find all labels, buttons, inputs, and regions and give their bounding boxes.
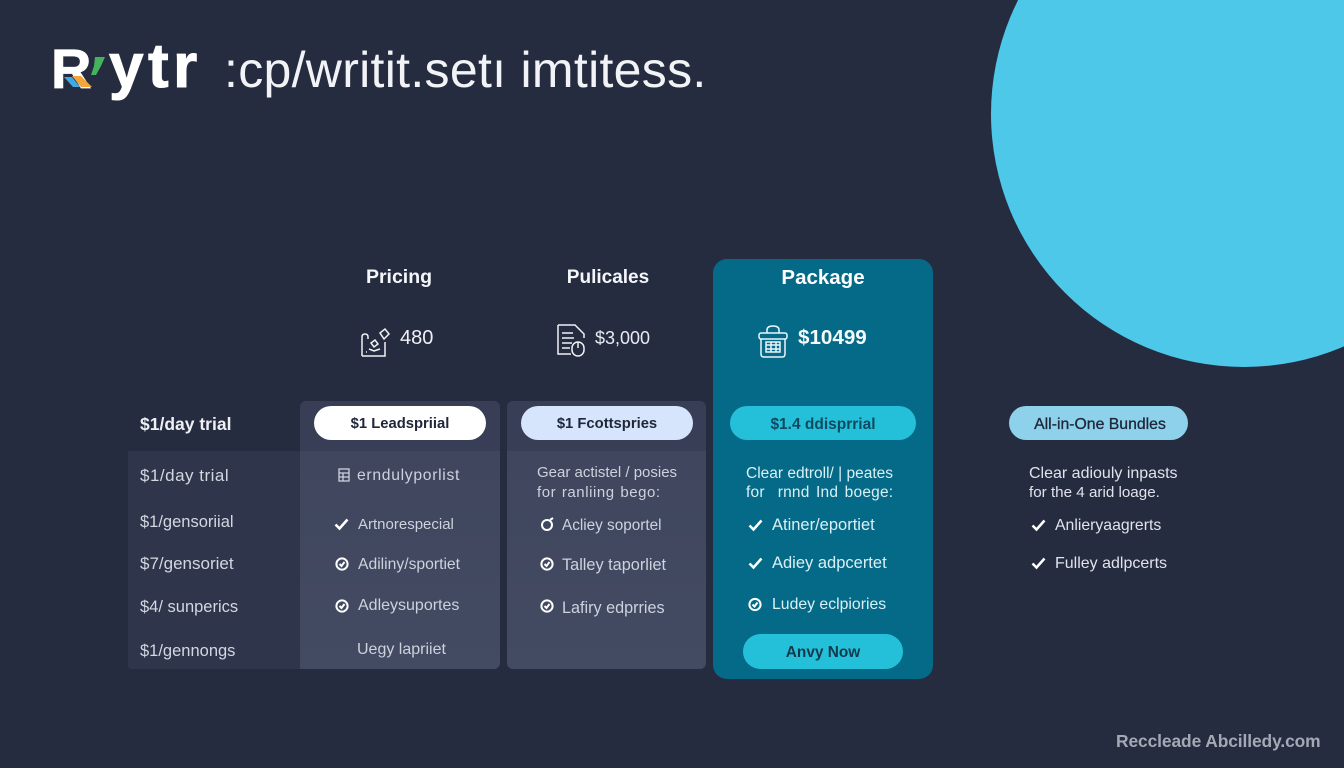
plan pill: $1 Leadspriial — [351, 416, 449, 432]
row strip background — [128, 451, 300, 669]
row label 3: $7/gensoriet — [140, 554, 234, 573]
feature text: Ludey eclpiories — [772, 596, 886, 613]
logo letter R: R — [51, 36, 91, 100]
feature text: Adiey adpcertet — [772, 554, 887, 572]
feature description: Clear adiouly inpasts — [1029, 465, 1178, 482]
price block — [758, 325, 867, 358]
title — [51, 32, 707, 100]
feature text: Anlieryaagrerts — [1055, 517, 1161, 534]
feature row 3 — [748, 596, 886, 613]
logo colour marks — [64, 57, 105, 87]
feature text: Artnorespecial — [358, 516, 454, 533]
feature row 3 — [540, 599, 665, 617]
icon: check — [334, 518, 348, 530]
panel: pricing column — [300, 401, 500, 669]
row label 1: $1/day trial — [140, 466, 229, 485]
feature text: Fulley adlpcerts — [1055, 555, 1167, 572]
feature text: erndulyporlist — [357, 467, 460, 484]
feature description: for ranliing bego: — [537, 484, 661, 501]
icon: circle mark — [541, 517, 554, 531]
row label 5: $1/gennongs — [140, 642, 235, 660]
feature text: Acliey soportel — [562, 517, 661, 534]
panel: all-in-one bundles column — [1009, 406, 1188, 572]
feature text: Adleysuportes — [358, 597, 459, 614]
panel: row labels — [128, 414, 300, 669]
price value: 480 — [400, 327, 433, 349]
plan pill — [314, 406, 486, 440]
plan pill — [521, 406, 693, 440]
icon: check — [1032, 520, 1046, 532]
icon: document — [338, 468, 350, 482]
feature text: Adiliny/sportiet — [358, 556, 460, 573]
feature text: Lafiry edprries — [562, 599, 665, 617]
feature row 4: Uegy lapriiet — [357, 641, 446, 658]
plan pill — [1009, 406, 1188, 440]
panel: package column — [713, 259, 933, 679]
icon: calendar basket — [758, 325, 788, 358]
icon: check — [748, 558, 762, 570]
feature text: Talley taporliet — [562, 556, 666, 574]
feature row 2 — [540, 556, 666, 574]
feature description: for rnnd Ind boege: — [746, 484, 893, 501]
button: Anvy Now: Anvy Now — [786, 644, 860, 661]
feature description: Gear actistel / posies — [537, 464, 677, 481]
price: Pulicales column — [557, 324, 650, 357]
icon: circled check — [335, 599, 349, 613]
heading: Package: Package — [781, 266, 865, 289]
feature row 1 — [748, 516, 875, 534]
feature row 1 — [1032, 517, 1161, 534]
plan pill: All-in-One Bundles — [1034, 416, 1166, 433]
feature row 2 — [748, 554, 887, 572]
decorative circle — [991, 0, 1344, 367]
heading: Pricing: Pricing — [366, 266, 432, 288]
price value: $10499 — [798, 326, 867, 349]
footer watermark: Reccleade Abcilledy.com — [1116, 731, 1321, 751]
icon: circled check — [748, 598, 762, 612]
heading: Pulicales: Pulicales — [567, 267, 649, 288]
row label 2: $1/gensoriial — [140, 513, 234, 531]
icon: document with pen — [361, 328, 390, 357]
icon: document with mouse — [557, 324, 585, 357]
button: Anvy Now — [743, 634, 903, 669]
icon: check — [748, 520, 762, 532]
plan pill: $1 Fcottspries — [557, 416, 657, 432]
row label 4: $4/ sunperics — [140, 598, 238, 616]
feature row 3 — [335, 597, 459, 614]
feature description — [746, 465, 893, 501]
plan pill: $1.4 ddisprrial — [770, 416, 876, 433]
feature row 2 — [335, 556, 460, 573]
feature description — [537, 464, 677, 501]
feature row 2 — [1032, 555, 1167, 572]
feature text: Atiner/eportiet — [772, 516, 875, 534]
feature row 1 — [541, 517, 661, 534]
panel: publicales column — [507, 401, 706, 669]
price: Pricing column — [361, 327, 433, 357]
icon: circled check — [540, 557, 554, 571]
feature row 1 — [334, 516, 454, 533]
icon: circled check — [540, 599, 554, 613]
icon: check — [1032, 558, 1046, 570]
logo letters ytr: ytr — [109, 32, 202, 100]
feature description — [1029, 465, 1178, 501]
plan pill — [730, 406, 916, 440]
feature description: for the 4 arid loage. — [1029, 484, 1160, 501]
feature line with icon — [338, 467, 460, 484]
price value: $3,000 — [595, 328, 650, 348]
feature description: Clear edtroll/ | peates — [746, 465, 893, 482]
icon: circled check — [335, 557, 349, 571]
row label bold: $1/day trial — [140, 414, 231, 434]
title text: :cp/writit.setı imtitess. — [224, 42, 707, 98]
logo: Rytr — [51, 32, 202, 100]
